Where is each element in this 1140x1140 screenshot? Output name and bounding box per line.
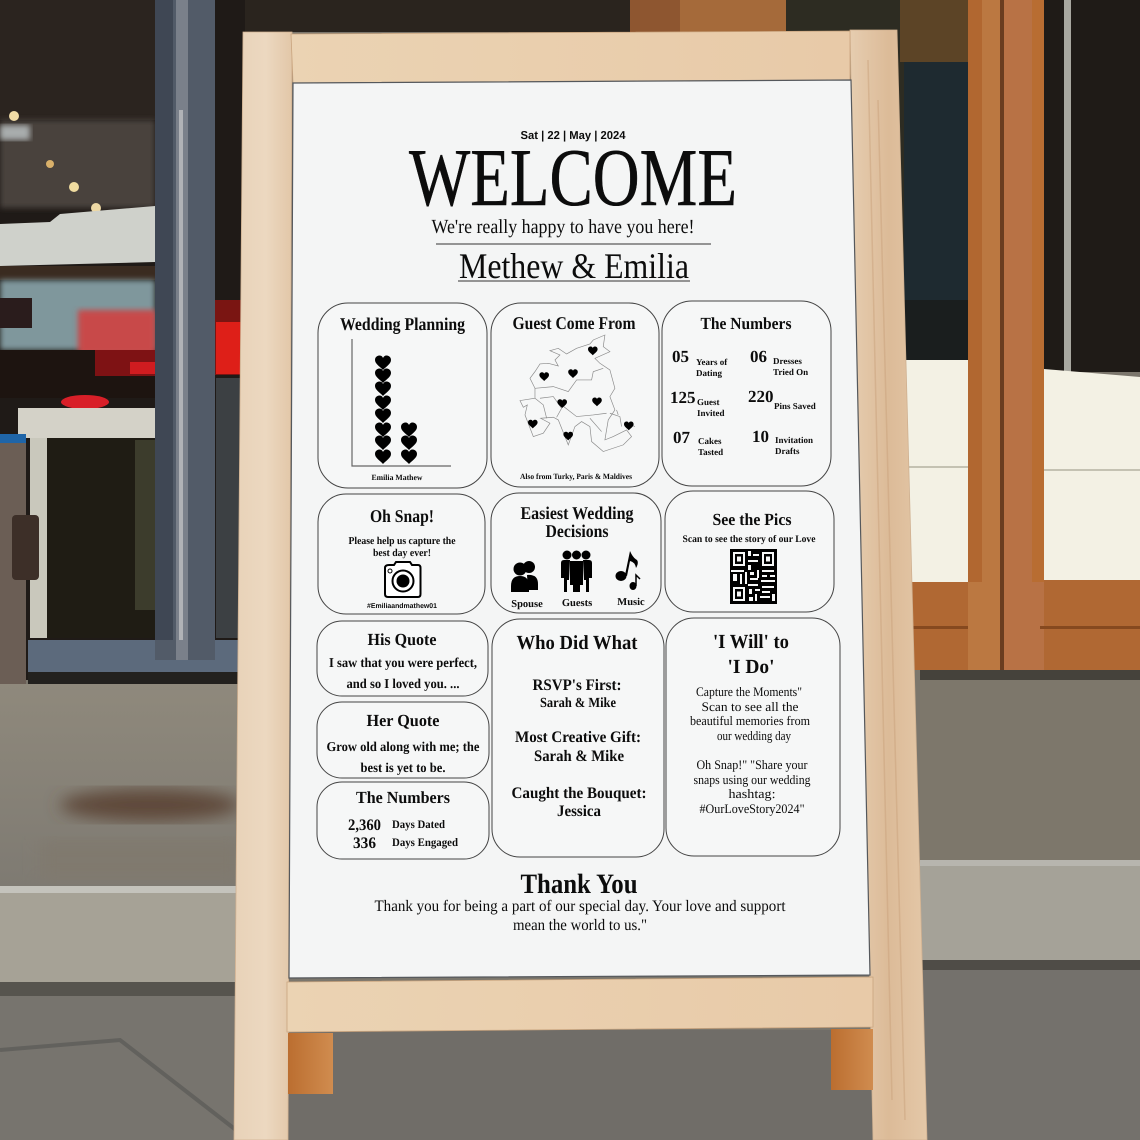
snap text: snaps using our wedding	[694, 772, 811, 787]
thank you heading: Thank You	[520, 869, 638, 900]
capture text: our wedding day	[717, 728, 791, 743]
icon labels: Music	[617, 597, 645, 608]
stat: dresses	[750, 347, 808, 377]
quote: and so I loved you. ...	[346, 676, 460, 691]
quote	[329, 655, 477, 691]
snap text: hashtag:	[728, 786, 776, 801]
heading: Her Quote	[366, 711, 440, 730]
stat: years	[672, 347, 728, 378]
qr code	[730, 549, 777, 604]
panel: easiest wedding decisions	[491, 493, 661, 613]
date: Sat | 22 | May | 2024	[520, 130, 626, 142]
hearts: emilia	[375, 356, 391, 464]
icon labels	[511, 597, 645, 610]
heading	[520, 503, 634, 541]
quote: best is yet to be.	[360, 760, 446, 775]
axis labels: Emilia Mathew	[372, 473, 423, 482]
stat: drafts	[752, 427, 813, 456]
capture text	[690, 684, 810, 743]
top rail	[291, 31, 850, 83]
stat: cakes: Tasted	[698, 447, 723, 457]
icon: spouse	[511, 561, 538, 592]
map of asia	[520, 335, 635, 452]
stat: days engaged	[353, 835, 459, 852]
stat: years: Years of	[696, 357, 728, 367]
subtitle: We're really happy to have you here!	[432, 216, 694, 238]
stat: guests: 125	[670, 388, 696, 407]
stat: dresses: 06	[750, 347, 767, 366]
stat: pins: 220	[748, 387, 774, 406]
stat: years: 05	[672, 347, 689, 366]
heading: Decisions	[546, 521, 608, 541]
quote: Grow old along with me; the	[326, 739, 480, 754]
heading: Easiest Wedding	[520, 503, 634, 523]
left post	[234, 32, 292, 1140]
panel: her quote	[317, 702, 489, 778]
panel: his quote	[317, 621, 488, 696]
heading: His Quote	[368, 630, 437, 649]
stat: cakes: Cakes	[698, 436, 722, 446]
bouquet	[512, 785, 646, 820]
stat: years: Dating	[696, 368, 723, 378]
panel: the numbers small	[317, 782, 489, 859]
stat: cakes: 07	[673, 428, 690, 447]
gift	[515, 729, 641, 765]
icon labels: Guests	[562, 598, 592, 609]
bottom rail	[287, 977, 873, 1032]
quote: I saw that you were perfect,	[329, 655, 477, 670]
stat: dresses: Dresses	[773, 356, 802, 366]
heading	[713, 631, 789, 678]
right post	[850, 30, 927, 1140]
thank you message: mean the world to us."	[513, 917, 647, 934]
stat: drafts: Drafts	[775, 446, 800, 456]
stat: days dated: Days Dated	[392, 819, 446, 831]
heading: Guest Come From	[512, 313, 636, 333]
heading: The Numbers	[356, 788, 450, 807]
stat: cakes	[673, 428, 723, 457]
stat: guests: Guest	[697, 397, 720, 407]
text: Please help us capture the	[348, 536, 456, 547]
hearts: mathew	[401, 422, 417, 464]
quote	[326, 739, 480, 775]
couple names: Methew & Emilia	[459, 246, 689, 286]
bouquet: Caught the Bouquet:	[512, 785, 646, 802]
rsvp: Sarah & Mike	[540, 696, 616, 711]
sign frame	[234, 30, 927, 1140]
heading: The Numbers	[700, 314, 792, 333]
left glass window	[0, 0, 245, 834]
stat: days engaged: Days Engaged	[392, 837, 459, 849]
snap text	[694, 757, 811, 816]
heading: Wedding Planning	[340, 314, 465, 334]
stat: days dated: 2,360	[348, 817, 381, 834]
thank you message: Thank you for being a part of our special day. Your love and support	[374, 898, 786, 915]
panel: who did what	[492, 619, 664, 857]
rsvp: RSVP's First:	[532, 677, 622, 694]
stat: drafts: 10	[752, 427, 769, 446]
icon: camera	[385, 562, 420, 597]
snap text: Oh Snap!" "Share your	[696, 757, 808, 772]
stat: dresses: Tried On	[773, 367, 808, 377]
concrete ground	[0, 670, 1140, 1140]
stat: drafts: Invitation	[775, 435, 813, 445]
thank you message	[374, 898, 786, 934]
gift: Sarah & Mike	[534, 748, 624, 765]
icon: music	[616, 551, 640, 590]
panel: oh snap	[318, 494, 485, 614]
poster board	[289, 80, 870, 978]
stat: pins: Pins Saved	[774, 401, 816, 411]
gift: Most Creative Gift:	[515, 729, 641, 746]
text	[348, 536, 456, 559]
text: best day ever!	[373, 548, 431, 559]
stat: guests: Invited	[697, 408, 725, 418]
text: Scan to see the story of our Love	[682, 534, 816, 545]
left leg	[288, 1033, 333, 1094]
stat: days dated	[348, 817, 446, 834]
snap text: #OurLoveStory2024"	[700, 801, 804, 816]
icon: guests	[561, 550, 592, 592]
rsvp	[532, 677, 622, 711]
panel: the numbers	[662, 301, 831, 486]
right leg	[831, 1029, 873, 1090]
heading: Oh Snap!	[370, 506, 434, 526]
stat: days engaged: 336	[353, 835, 376, 852]
panel: wedding planning	[318, 303, 487, 488]
panel: see the pics	[665, 491, 834, 612]
heading: See the Pics	[712, 510, 792, 529]
capture text: Capture the Moments"	[696, 684, 802, 699]
capture text: beautiful memories from	[690, 713, 810, 728]
axes	[352, 339, 451, 466]
right wooden doors	[245, 0, 1140, 670]
stat: guests	[670, 388, 725, 418]
hashtag: #Emiliaandmathew01	[367, 602, 437, 610]
icon labels: Spouse	[511, 599, 543, 610]
title: welcome: WELCOME	[409, 132, 737, 223]
map hearts	[528, 346, 634, 440]
panel: i will to i do	[666, 618, 840, 856]
heading: 'I Do'	[728, 656, 774, 678]
bouquet: Jessica	[557, 803, 601, 820]
caption: Also from Turky, Paris & Maldives	[520, 472, 632, 481]
heading: Who Did What	[516, 632, 638, 654]
stat: pins	[748, 387, 816, 411]
capture text: Scan to see all the	[702, 699, 799, 714]
heading: 'I Will' to	[713, 631, 789, 653]
panel: guest come from	[491, 303, 659, 487]
